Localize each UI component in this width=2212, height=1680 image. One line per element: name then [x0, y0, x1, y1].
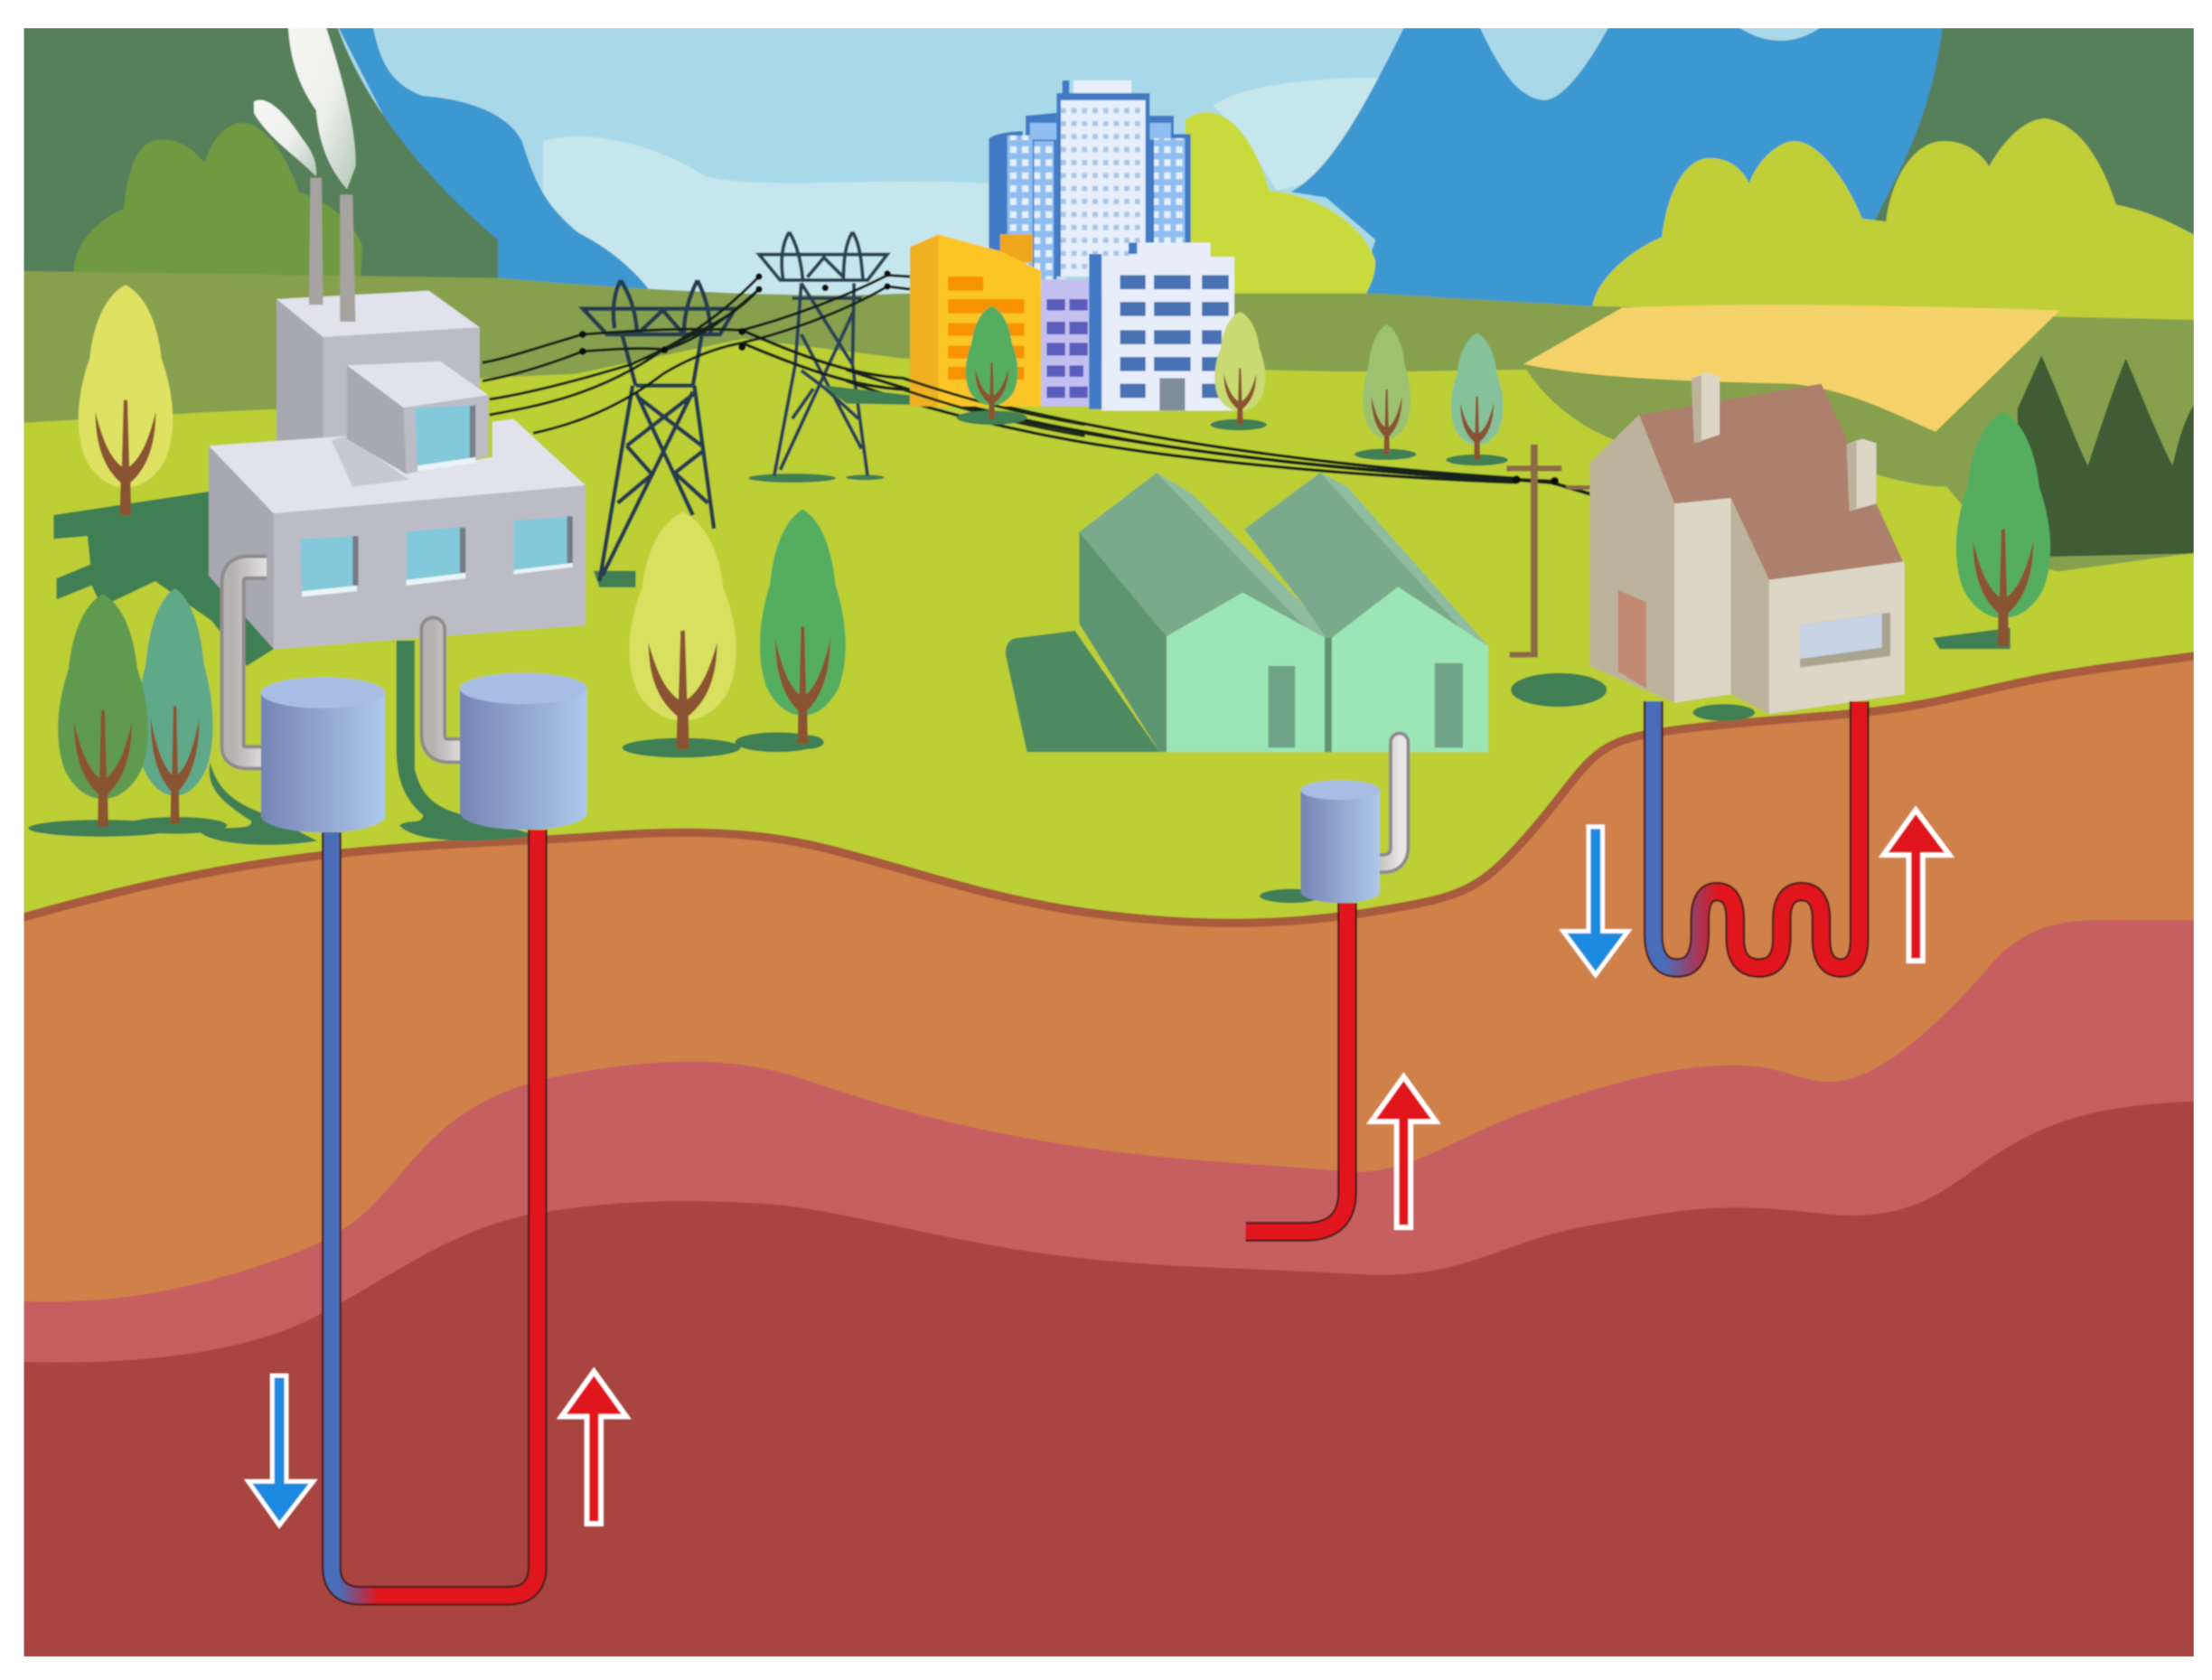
green houses — [1006, 473, 1488, 752]
power pylon back — [748, 232, 887, 483]
yellow field — [1523, 305, 2059, 432]
trees: left pair — [28, 588, 227, 837]
sky — [337, 28, 1820, 296]
forest — [2018, 355, 2212, 558]
geothermal pipe left — [332, 830, 538, 1596]
tree: pale yellow left — [79, 285, 173, 515]
white office building — [1089, 243, 1234, 410]
dark green hills — [14, 14, 2212, 289]
smoke plumes — [254, 14, 356, 189]
pole wire dots — [1513, 475, 1608, 502]
grey connector pipes — [233, 568, 470, 757]
upper block — [276, 291, 480, 446]
tree right — [1933, 412, 2050, 649]
tank right — [460, 673, 586, 830]
orange crust layer — [23, 660, 2194, 1303]
geothermal pipe right — [1654, 701, 1860, 968]
power lines — [483, 275, 1604, 498]
middle block with window — [209, 361, 586, 649]
purple building — [1041, 279, 1092, 407]
arrow: hot up right — [1883, 810, 1950, 961]
pink rock layer — [23, 920, 2194, 1363]
arrow: hot up middle — [1372, 1076, 1436, 1227]
utility pole — [1506, 445, 1628, 658]
bush on right — [1592, 117, 2194, 322]
tower block — [989, 80, 1191, 282]
tank left — [261, 677, 385, 832]
tank shadows — [201, 641, 536, 845]
arrow: cold down left — [248, 1375, 314, 1525]
trees centre left — [622, 510, 846, 757]
lime ground — [23, 338, 2194, 920]
bush behind factory — [74, 123, 362, 289]
factory — [209, 14, 586, 649]
factory windows — [301, 516, 573, 596]
storage tanks — [261, 673, 586, 832]
yellow building — [910, 234, 1041, 407]
middle tank and pipe — [1260, 742, 1400, 903]
geothermal pipe middle — [1246, 903, 1347, 1232]
ground surface line — [14, 653, 2212, 923]
arrow: cold down right — [1563, 827, 1628, 975]
wires passing in front of city — [903, 378, 1085, 436]
blue mountains — [338, 28, 1943, 307]
bush behind city — [1184, 111, 1377, 295]
arrow: hot up left — [561, 1372, 626, 1524]
farmhouse — [1511, 372, 1905, 721]
city buildings — [910, 80, 1234, 410]
trees near city — [957, 306, 1508, 465]
chimneys — [309, 178, 355, 322]
deep red rock layer — [14, 1101, 2212, 1679]
power pylon front — [583, 280, 735, 587]
wire insulators — [579, 270, 891, 355]
olive mid band — [14, 271, 2212, 593]
factory shadow — [53, 491, 274, 666]
